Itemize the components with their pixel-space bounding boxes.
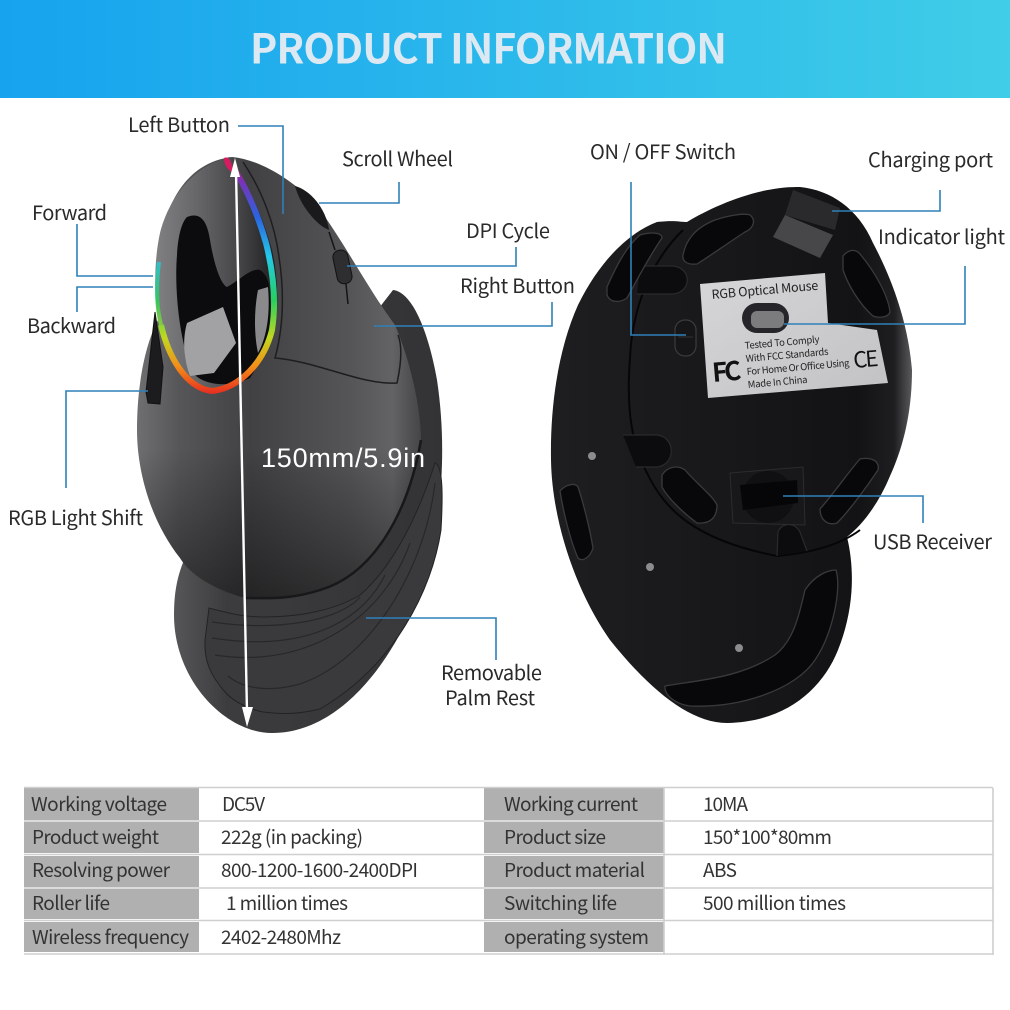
product sticker: With FCC Standards [745,344,829,365]
table right column text: 500 million times [703,889,846,916]
callout: USB receiver: USB Receiver [873,526,992,555]
callout: backward: Backward [27,310,116,339]
palm rest grooves [212,483,435,689]
palm rest pad [205,463,442,714]
palm rest [174,290,442,733]
callout: on/off switch: ON / OFF Switch [590,136,736,165]
callout: forward [32,197,153,276]
callout: forward: Forward [32,197,107,226]
callout: removable palm rest: Removable [441,657,542,686]
side buttons [146,312,163,404]
scroll wheel [295,186,329,230]
table left column text: Wireless frequency [32,923,189,950]
table left column text [31,790,418,950]
callout: on/off switch [590,136,736,335]
table right column text: Product size [504,823,606,850]
callout: DPI cycle: DPI Cycle [466,215,550,244]
table left column text: Working voltage [31,790,167,817]
table right column text: Product material [504,856,645,883]
table right column text: 10MA [703,790,748,817]
screws [588,452,743,652]
power switch [675,320,696,356]
callout: right button: Right Button [460,270,575,299]
dimension arrow [230,158,253,727]
callout: indicator light: Indicator light [878,221,1005,250]
DPI button [332,249,353,285]
table left column text: 2402-2480Mhz [221,923,341,950]
table right column text: Switching life [504,889,617,916]
callout: USB receiver [783,496,992,555]
glossy thumb area [155,157,277,393]
table left column text: Roller life [32,889,110,916]
callout: scroll wheel: Scroll Wheel [342,143,453,172]
callout: indicator light [784,221,1005,324]
icon: RGB light ring [161,172,274,391]
left mouse: front view [137,157,442,733]
product sticker: Tested To Comply [744,332,820,352]
table left column text: Resolving power [32,856,171,883]
dimension label: 150mm/5.9in [261,443,425,473]
callout: removable palm rest: Palm Rest [445,682,535,711]
callout: RGB light shift [8,391,148,531]
icon: magenta tip [224,158,233,173]
mouse body [137,157,421,598]
header banner [0,0,1010,98]
table left column text: Product weight [32,823,159,850]
callout: RGB light shift: RGB Light Shift [8,502,143,531]
product sticker: FC [710,351,743,390]
table right column text: Working current [504,790,638,817]
product sticker: Made In China [747,372,808,391]
table right column text [504,790,846,950]
table grey label cells [24,788,664,952]
charging port [773,190,840,258]
callout: backward [27,287,153,339]
right button panel [243,162,401,383]
body shading [137,325,421,598]
USB receiver bay [730,467,805,525]
title: PRODUCT INFORMATION [250,16,727,76]
right mouse: underside view [551,187,912,723]
table right column text: 150*100*80mm [703,823,832,850]
table right column text: ABS [703,856,737,883]
table left column text: 1 million times [226,889,348,916]
callout: left button [128,109,283,214]
specification table [24,788,993,955]
base plate outline [629,230,860,556]
product sticker: For Home Or Office Using [746,355,851,378]
callout: DPI cycle [347,215,550,266]
button groove [329,232,348,304]
rubber feet slots [560,214,890,706]
body edge seam against palm rest [245,440,421,598]
callout: charging port: Charging port [868,144,993,173]
table left column text: DC5V [222,790,265,817]
product sticker: CE [852,341,880,375]
callout: left button: Left Button [128,109,230,138]
table right column text: operating system [504,923,649,950]
ring fading left side [157,262,161,325]
callout: removable palm rest [366,618,542,711]
callout: right button [374,270,575,326]
mounting tabs [623,266,807,556]
table rule lines [24,788,993,955]
product sticker [700,273,888,398]
callout: charging port [832,144,993,211]
product sticker: RGB Optical Mouse [711,275,819,303]
callout: scroll wheel [319,143,453,203]
table left column text: 222g (in packing) [221,823,363,850]
outer silhouette [551,187,912,723]
table left column text: 800-1200-1600-2400DPI [221,856,418,883]
